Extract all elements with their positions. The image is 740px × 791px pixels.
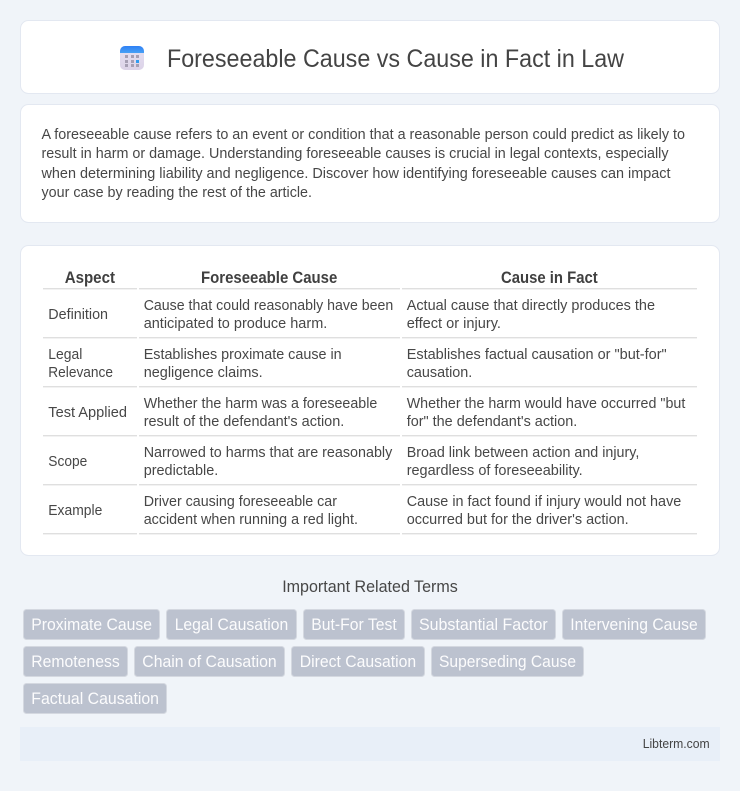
table header row: Cause in Fact — [501, 269, 598, 287]
term chip: Factual Causation: Factual Causation — [31, 689, 159, 708]
term chip: Legal Causation: Legal Causation — [175, 615, 288, 634]
icon: calendar — [120, 46, 144, 70]
term chip: Substantial Factor — [412, 610, 556, 640]
row: example: accident when running a red light. — [144, 512, 358, 528]
row: legal relevance — [43, 347, 697, 387]
row: example: Example — [48, 503, 102, 519]
row: definition: Actual cause that directly produces the — [407, 298, 655, 314]
intro paragraph: your case by reading the rest of the article. — [42, 185, 312, 201]
row: scope: Broad link between action and injury, — [407, 445, 639, 461]
table header row: Aspect — [65, 269, 115, 287]
row: scope: predictable. — [144, 463, 218, 479]
row: legal relevance: negligence claims. — [144, 365, 263, 381]
term chip: Chain of Causation: Chain of Causation — [142, 652, 277, 671]
row: definition: anticipated to produce harm. — [144, 316, 327, 332]
row: test applied: Whether the harm was a foreseeable — [144, 396, 377, 412]
panel: header — [20, 20, 720, 94]
row: test applied: for" the defendant's action. — [407, 414, 577, 430]
table header row: Foreseeable Cause — [201, 269, 337, 287]
term chip: Proximate Cause: Proximate Cause — [31, 615, 152, 634]
term chip: Remoteness: Remoteness — [31, 652, 120, 671]
intro paragraph — [41, 127, 685, 201]
term chip: Direct Causation: Direct Causation — [300, 652, 416, 671]
row: definition: effect or injury. — [407, 316, 501, 332]
term chip: Superseding Cause: Superseding Cause — [439, 652, 576, 671]
term chip: Remoteness — [24, 646, 128, 676]
term chip: Intervening Cause — [562, 610, 706, 640]
table header row — [43, 269, 697, 289]
term chip: Superseding Cause — [432, 646, 584, 676]
row: legal relevance: Relevance — [48, 365, 113, 381]
term chip: But-For Test — [304, 610, 404, 640]
row: test applied: Test Applied — [48, 405, 127, 421]
row: scope: Scope — [48, 454, 87, 470]
title: Foreseeable Cause vs Cause in Fact in Law — [167, 46, 624, 73]
term chip: Substantial Factor: Substantial Factor — [419, 615, 548, 634]
row: test applied — [43, 396, 697, 436]
row: example: occurred but for the driver's action. — [407, 512, 629, 528]
term chip: Intervening Cause: Intervening Cause — [570, 615, 698, 634]
term chip: Factual Causation — [24, 684, 166, 714]
row: example — [43, 494, 697, 534]
related terms heading: Important Related Terms — [282, 578, 458, 596]
row: definition: Cause that could reasonably have been — [144, 298, 393, 314]
intro paragraph: when determining liability and negligence. Discover how identifying foreseeable causes can impact — [41, 166, 671, 182]
row: legal relevance: causation. — [407, 365, 472, 381]
panel: comparison table — [20, 246, 720, 556]
row: test applied: result of the defendant's action. — [144, 414, 344, 430]
row: scope — [43, 445, 697, 485]
row: scope: regardless of foreseeability. — [407, 463, 583, 479]
row: legal relevance: Establishes factual causation or "but-for" — [407, 347, 667, 363]
footer credit: Libterm.com — [643, 736, 710, 751]
row: definition: Definition — [48, 307, 108, 323]
row: example: Driver causing foreseeable car — [144, 494, 337, 510]
term chip: Proximate Cause — [24, 610, 160, 640]
intro paragraph: A foreseeable cause refers to an event or condition that a reasonable person could predict as likely to — [42, 127, 685, 143]
intro paragraph: result in harm or damage. Understanding foreseeable causes is crucial in legal contexts, especially — [42, 146, 669, 162]
term chip: Legal Causation — [166, 610, 296, 640]
row: example: Cause in fact found if injury would not have — [407, 494, 681, 510]
row: test applied: Whether the harm would have occurred "but — [407, 396, 685, 412]
term chip: Direct Causation — [292, 646, 424, 676]
row: legal relevance: Establishes proximate cause in — [144, 347, 342, 363]
term chip: But-For Test: But-For Test — [311, 615, 397, 634]
footer — [20, 727, 720, 761]
row: scope: Narrowed to harms that are reasonably — [144, 445, 393, 461]
panel: related terms — [24, 578, 706, 714]
term chip: Chain of Causation — [134, 646, 284, 676]
panel: intro text — [20, 104, 720, 222]
row: legal relevance: Legal — [48, 347, 82, 363]
row: definition — [43, 298, 697, 338]
